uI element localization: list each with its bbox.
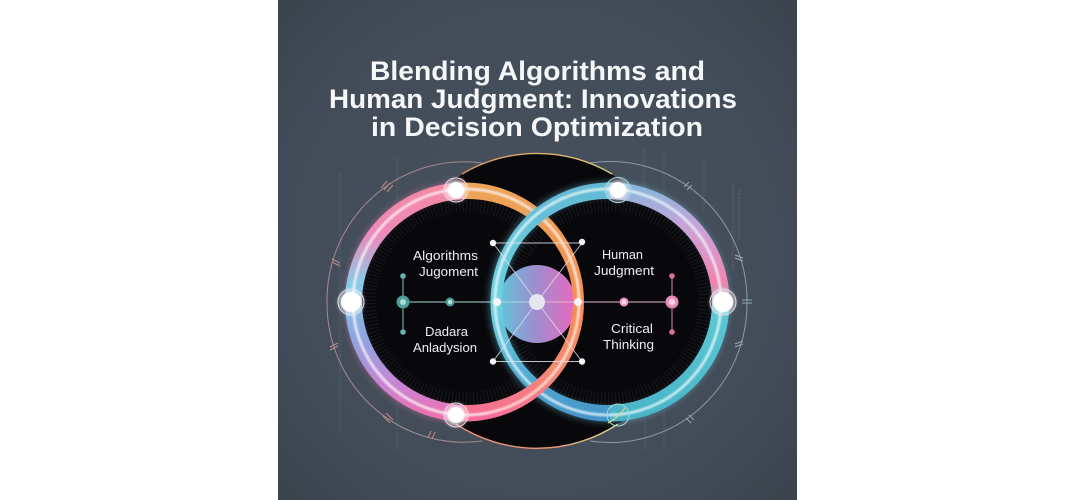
central black circle	[390, 154, 684, 448]
ring node: left	[338, 289, 364, 315]
outer arc: left thin orbit	[327, 162, 482, 442]
connector network	[403, 243, 672, 362]
outer arc: right thin orbit	[590, 162, 752, 442]
decorative data columns	[340, 150, 739, 452]
label: Critical Thinking: Thinking	[603, 337, 654, 352]
ring node: right	[710, 289, 736, 315]
label: Human Judgment: Judgment	[594, 263, 654, 278]
panel: dark poster background	[278, 0, 797, 500]
label: Critical Thinking: Critical	[611, 321, 653, 336]
label: Dadara Anladysion	[413, 324, 477, 355]
label: Algorithms Jugoment: Jugoment	[419, 264, 478, 279]
label: Dadara Anladysion: Anladysion	[413, 340, 477, 355]
title: Human Judgment: Innovations	[329, 84, 737, 114]
label: Human Judgment	[594, 247, 654, 278]
connector nodes: center	[490, 239, 585, 365]
label: Critical Thinking	[603, 321, 654, 352]
ring: right tapered band	[490, 182, 730, 422]
ring node: bottom right hollow	[607, 404, 629, 426]
ring node: top right	[606, 178, 630, 202]
left circle interior	[358, 194, 574, 410]
right circle interior	[500, 194, 716, 410]
ring node: top left	[444, 178, 468, 202]
label: Algorithms Jugoment: Algorithms	[413, 248, 479, 263]
ring: left tapered band	[345, 182, 584, 422]
title: Blending Algorithms and	[370, 56, 705, 86]
ring: left band passing over right ring at the bottom crossing	[490, 318, 583, 419]
label: Algorithms Jugoment	[413, 248, 479, 279]
label: Dadara Anladysion: Dadara	[425, 324, 469, 339]
label: Human Judgment: Human	[602, 247, 643, 262]
title: in Decision Optimization	[371, 112, 703, 142]
ring node: bottom left	[444, 403, 468, 427]
connector nodes: right	[620, 273, 678, 335]
center gradient disc	[498, 265, 576, 343]
connector nodes: left	[396, 273, 454, 335]
title	[329, 56, 737, 142]
central circle rim	[456, 153, 618, 448]
